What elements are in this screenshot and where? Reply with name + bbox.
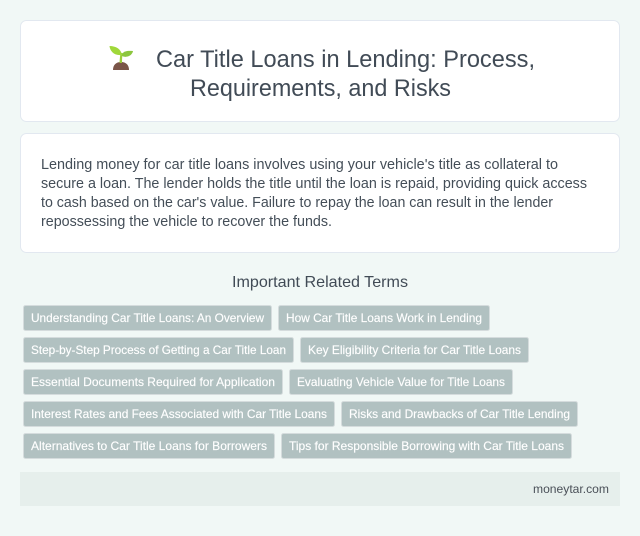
tag: Step-by-Step Process of Getting a Car Title Loan	[31, 343, 286, 357]
tag: Alternatives to Car Title Loans for Borrowers	[31, 439, 267, 453]
panel: description	[20, 134, 620, 252]
tag: Key Eligibility Criteria for Car Title Loans	[308, 343, 521, 357]
tag	[24, 338, 294, 362]
tag	[24, 306, 272, 330]
text block: description	[41, 157, 587, 230]
tag	[24, 434, 274, 458]
tag	[24, 402, 334, 426]
panel: title	[20, 20, 620, 122]
text block: description: Lending money for car title loans involves using your vehicle's title as collateral to	[41, 157, 558, 173]
icon: seedling	[110, 46, 133, 70]
tag	[290, 370, 512, 394]
heading: title text	[156, 46, 535, 102]
tag: Essential Documents Required for Application	[31, 375, 275, 389]
tag: How Car Title Loans Work in Lending	[286, 311, 482, 325]
text block: description: repossessing the vehicle to recover the funds.	[41, 214, 332, 230]
heading: important related terms: Important Related Terms	[232, 274, 408, 291]
tag: Evaluating Vehicle Value for Title Loans	[297, 375, 505, 389]
footer	[20, 472, 620, 506]
tag: Risks and Drawbacks of Car Title Lending	[349, 407, 570, 421]
tag	[278, 306, 490, 330]
tag	[342, 402, 578, 426]
tag group: related terms	[24, 306, 578, 458]
tag	[300, 338, 528, 362]
tag: Interest Rates and Fees Associated with Car Title Loans	[31, 407, 327, 421]
heading: title text: Requirements, and Risks	[190, 75, 451, 102]
tag: Understanding Car Title Loans: An Overview	[31, 311, 264, 325]
text block: description: secure a loan. The lender holds the title until the loan is repaid, providing quick access	[41, 176, 587, 192]
text: source: moneytar.com	[533, 482, 609, 496]
heading: title text: Car Title Loans in Lending: Process,	[156, 46, 535, 73]
tag	[282, 434, 572, 458]
text block: description: to cash based on the car's value. Failure to repay the loan can result in the lender	[41, 195, 553, 211]
tag: Tips for Responsible Borrowing with Car Title Loans	[289, 439, 564, 453]
tag	[24, 370, 282, 394]
